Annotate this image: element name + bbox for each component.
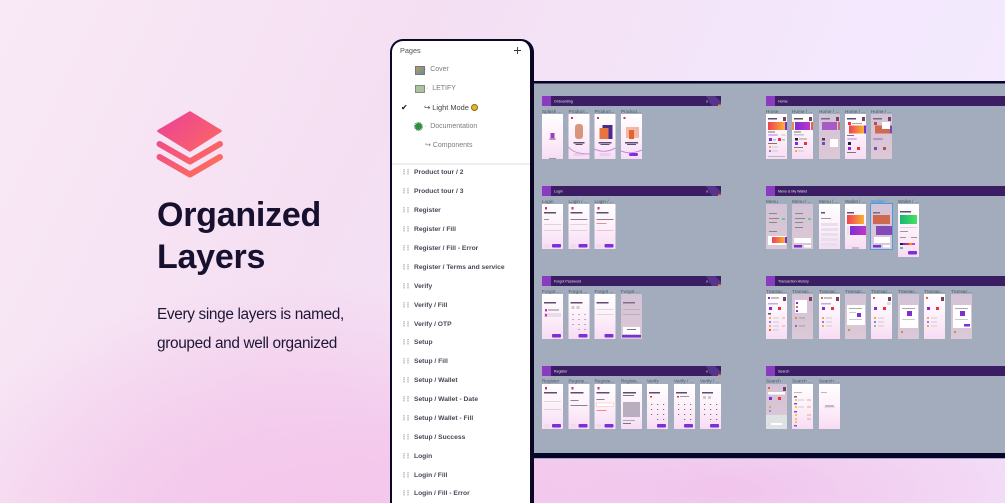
section: home: Home / ... (819, 109, 839, 114)
layer list: Register / Fill - Error (414, 244, 478, 252)
layer list: Setup (414, 338, 433, 346)
section: home: Home (778, 100, 788, 104)
layer list: Register / Terms and service (414, 264, 505, 270)
section: home: Home / ... (792, 109, 812, 114)
section: search: Search (778, 370, 789, 374)
section: login (542, 186, 721, 249)
section: transaction history: Transac... (924, 289, 945, 294)
section: menu and wallet: Menu / ... (819, 199, 839, 204)
layer list: Login / Fill - Error (414, 490, 470, 496)
section: forgot password: Forgot ... (594, 289, 613, 294)
section: menu and wallet: Menu (766, 199, 778, 204)
section: transaction history: Transac... (845, 289, 866, 294)
section: register (542, 366, 721, 429)
heading: pages: Pages (400, 46, 421, 55)
icon: check mark: ✔ (401, 103, 408, 112)
icon: cover thumbnail (415, 66, 425, 75)
layer list: Setup / Wallet (414, 376, 458, 384)
section: forgot password: Forgot ... (621, 289, 640, 294)
section: forgot password: Ⅲ Shikarra (706, 280, 720, 284)
section: register: Registe... (621, 378, 641, 384)
title: Layers (157, 238, 265, 276)
icon: sun emoji (471, 104, 478, 111)
icon: add page plus (514, 47, 521, 54)
layer list: Product tour / 3 (414, 188, 463, 194)
section: menu and wallet: Menu & My Wallet (778, 190, 807, 194)
section: onboarding: Ⅲ Shikarra (706, 100, 720, 104)
section: forgot password (542, 276, 721, 339)
section: register: Register (554, 370, 568, 374)
section: home: Home / ... (871, 109, 891, 114)
section: search: Search ... (819, 378, 839, 384)
section: menu and wallet: Menu / ... (792, 199, 812, 204)
panel: layers sidebar (390, 39, 534, 503)
layer list: Product tour / 2 (414, 168, 463, 176)
section: transaction history (766, 276, 1005, 339)
layer list: Register (414, 206, 441, 214)
section: onboarding: Onboarding (554, 100, 573, 104)
section: register: Register (542, 378, 560, 384)
layer list: Setup / Fill (414, 358, 448, 364)
section: register: Verify / ... (700, 378, 720, 384)
section: search (766, 366, 1005, 429)
layer list (403, 168, 505, 496)
section: onboarding: Product... (594, 109, 615, 114)
layer list: Register / Fill (414, 226, 456, 232)
section: login: Login / ... (568, 199, 588, 204)
section: home: Home (766, 109, 779, 114)
icon: clover (415, 123, 422, 130)
section: transaction history: Transaction History (778, 280, 809, 284)
subtitle text (157, 306, 344, 352)
icon: stacked layers logo (156, 111, 223, 178)
page item: components: ↪ Components (425, 142, 472, 149)
section: search: Search ... (792, 378, 812, 384)
section: onboarding (542, 96, 721, 159)
title: Organized (157, 196, 321, 234)
layer list: Verify (414, 282, 432, 290)
section: login: Ⅲ Shikarra (706, 190, 720, 194)
title (157, 196, 321, 276)
page item: letify: · LETIFY (426, 85, 456, 92)
section: forgot password: Forgot Password (554, 280, 581, 284)
section: register: Registe... (594, 378, 614, 384)
section: forgot password: Forgot ... (542, 289, 561, 294)
layer list: Login (414, 452, 432, 460)
subtitle text: grouped and well organized (157, 335, 337, 352)
section: transaction history: Transac... (898, 289, 919, 294)
layer list: Setup / Wallet - Fill (414, 414, 473, 422)
canvas: figma frames overview (534, 81, 1005, 459)
section: transaction history: Transac... (871, 289, 892, 294)
subtitle text: Every singe layers is named, (157, 306, 344, 323)
section: transaction history: Transac... (819, 289, 840, 294)
section: onboarding: Splash ... (542, 109, 562, 114)
section: home: Home / ... (845, 109, 865, 114)
section: transaction history: Transac... (792, 289, 813, 294)
section: login: Login (554, 190, 563, 194)
section: menu and wallet (766, 186, 1005, 257)
section: register: Registe... (568, 378, 588, 384)
section: menu and wallet: Wallet / ... (871, 199, 892, 204)
page item: documentation: · Documentation (424, 123, 477, 130)
section: onboarding: Product... (621, 109, 641, 114)
section: home (766, 96, 1005, 159)
section: onboarding: Product... (568, 109, 589, 114)
page item: light mode: ↪ Light Mode (424, 103, 469, 112)
section: menu and wallet: Wallet / ... (898, 199, 919, 204)
section: login: Login / ... (594, 199, 614, 204)
section: transaction history: Transac... (766, 289, 787, 294)
section: login: Login (542, 199, 554, 204)
divider line (392, 163, 530, 164)
layer list: Login / Fill (414, 472, 447, 478)
page item: cover: · Cover (424, 66, 449, 73)
section: register: Ⅲ Shikarra (706, 370, 720, 374)
section: search: Search (766, 378, 781, 384)
layer list: Setup / Success (414, 434, 465, 440)
layer list: Verify / Fill (414, 302, 447, 308)
layer list: Setup / Wallet - Date (414, 396, 478, 402)
layer list: Verify / OTP (414, 320, 452, 328)
section: menu and wallet: Wallet / ... (845, 199, 866, 204)
icon: letify thumbnail (415, 85, 425, 93)
section: register: Verify / ... (674, 378, 694, 384)
section: transaction history: Transac... (951, 289, 972, 294)
section: forgot password: Forgot ... (568, 289, 587, 294)
section: register: Verify (647, 378, 659, 384)
